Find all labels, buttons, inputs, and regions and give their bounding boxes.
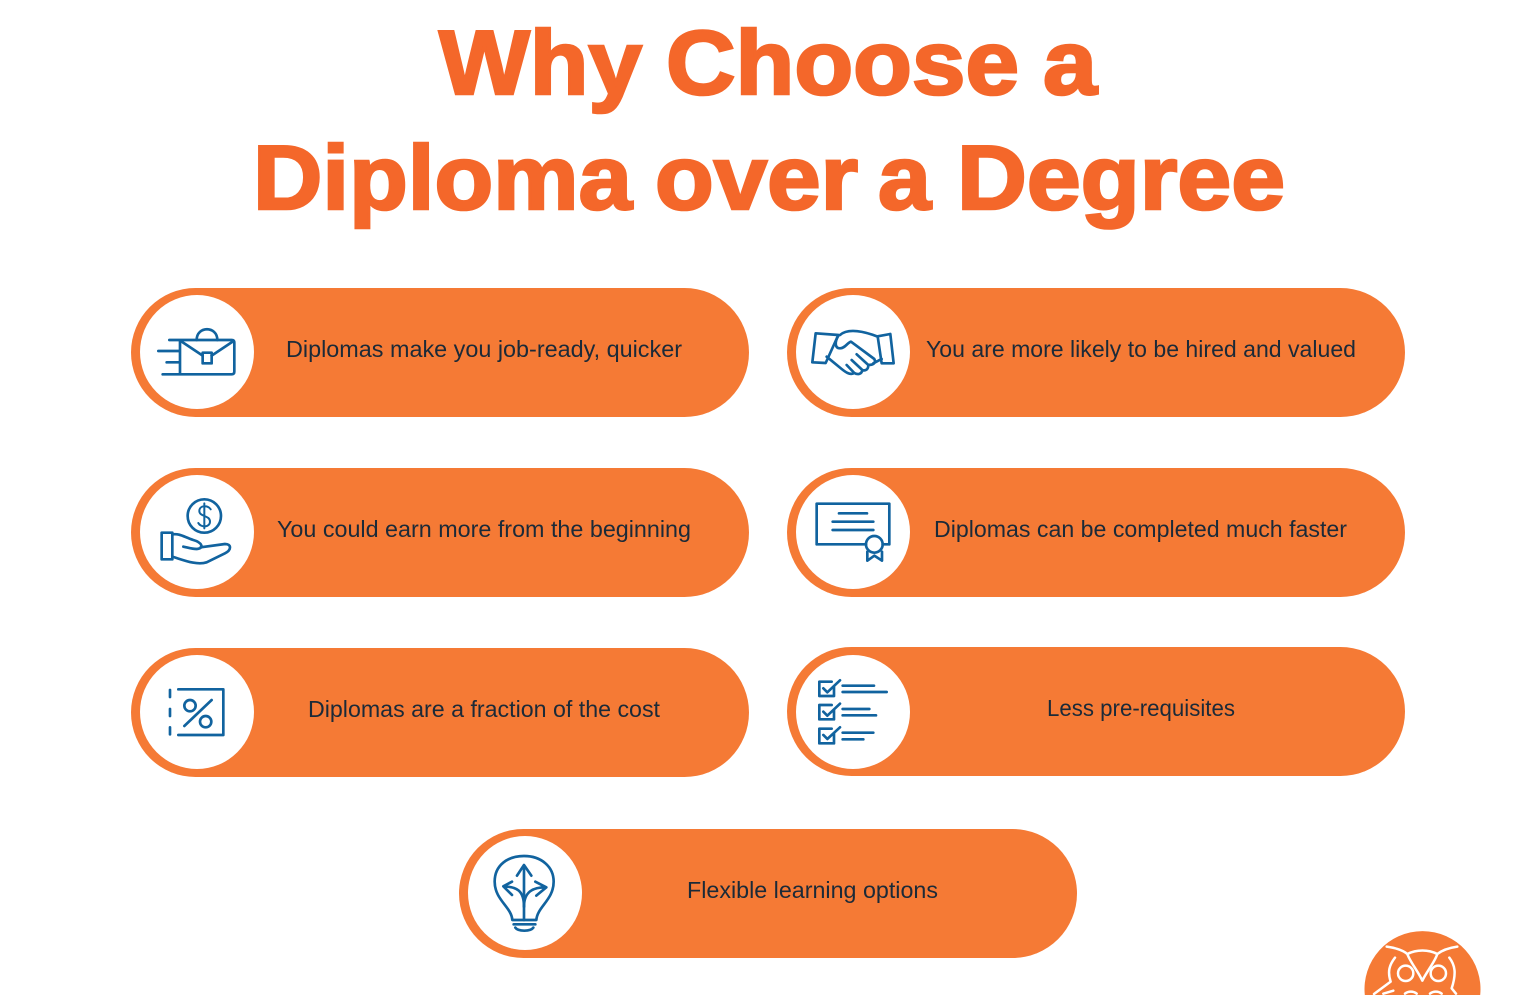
text: You are more likely to be hired and valued bbox=[926, 336, 1356, 362]
panel: completed faster bbox=[787, 468, 1405, 597]
icon: percent tag bbox=[170, 689, 223, 735]
text: Flexible learning options bbox=[687, 877, 938, 903]
panel: earn more bbox=[131, 468, 749, 597]
panel: less pre-requisites bbox=[787, 647, 1405, 776]
icon: hand with dollar coin bbox=[162, 499, 230, 563]
title: Why bbox=[439, 13, 642, 114]
panel: fraction of the cost bbox=[131, 648, 749, 777]
icon: light bulb with arrows bbox=[495, 856, 554, 931]
logo: owl badge bbox=[1365, 931, 1480, 995]
text: You could earn more from the beginning bbox=[277, 516, 691, 542]
panel: hired and valued bbox=[787, 288, 1405, 417]
icon: checklist bbox=[819, 680, 887, 743]
title: a bbox=[1043, 13, 1098, 114]
title bbox=[253, 13, 1285, 229]
text: Diplomas can be completed much faster bbox=[934, 516, 1347, 542]
title: Degree bbox=[957, 128, 1285, 229]
panel: job-ready bbox=[131, 288, 749, 417]
title: Choose bbox=[666, 13, 1019, 114]
text: Less pre-requisites bbox=[1047, 695, 1235, 721]
icon: handshake bbox=[812, 331, 894, 374]
text: Diplomas are a fraction of the cost bbox=[308, 696, 660, 722]
panel: flexible learning bbox=[459, 829, 1077, 958]
text: Diplomas make you job-ready, quicker bbox=[286, 336, 682, 362]
title: over bbox=[655, 128, 858, 229]
icon: briefcase bbox=[158, 329, 234, 374]
title: Diploma bbox=[253, 128, 633, 229]
title: a bbox=[878, 128, 932, 229]
icon: certificate bbox=[817, 504, 889, 561]
